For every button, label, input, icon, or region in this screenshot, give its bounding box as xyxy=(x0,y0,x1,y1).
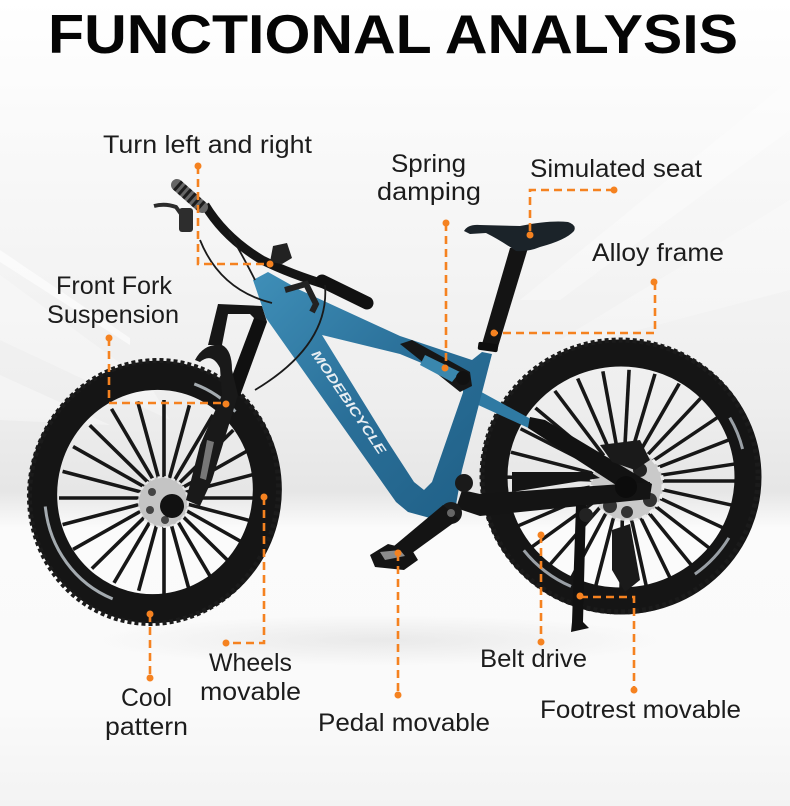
frame xyxy=(253,272,492,518)
rear wheel xyxy=(482,340,758,612)
callout: simulated seat: Simulated seat xyxy=(530,155,702,183)
callout: spring damping: damping xyxy=(377,178,481,206)
kickstand xyxy=(571,505,593,632)
title: FUNCTIONAL ANALYSIS xyxy=(48,3,738,65)
seat collar xyxy=(478,342,498,352)
front fork xyxy=(186,304,267,506)
bicycle xyxy=(0,185,758,652)
callout: wheels movable: movable xyxy=(200,678,301,706)
callout: spring damping xyxy=(377,150,481,372)
swingarm and chainstay xyxy=(456,383,652,516)
callout: belt drive xyxy=(480,532,587,673)
handlebar xyxy=(154,185,367,312)
callout: turn left and right: Turn left and right xyxy=(103,131,312,159)
callout: simulated seat xyxy=(526,155,702,238)
callout: belt drive: Belt drive xyxy=(480,645,587,673)
callout: wheels movable: Wheels xyxy=(209,649,292,677)
callout: front fork suspension: Front Fork xyxy=(56,272,173,300)
model name on frame: MODEBICYCLE xyxy=(309,347,389,457)
callout: alloy frame xyxy=(490,239,724,336)
callout: front fork suspension: Suspension xyxy=(47,301,179,329)
brake cables xyxy=(200,232,325,390)
rear disc brake xyxy=(591,449,663,521)
derailleur xyxy=(612,524,640,592)
callout: footrest movable xyxy=(540,592,741,724)
callout: front fork suspension xyxy=(47,272,230,408)
callout: cool pattern xyxy=(105,610,188,741)
callout: alloy frame: Alloy frame xyxy=(592,239,724,267)
callout: cool pattern: Cool xyxy=(121,684,172,712)
callout: footrest movable: Footrest movable xyxy=(540,696,741,724)
pedal xyxy=(370,544,418,570)
callout: pedal movable: Pedal movable xyxy=(318,709,490,737)
callout: cool pattern: pattern xyxy=(105,713,188,741)
callout: wheels movable xyxy=(200,494,301,706)
seat post xyxy=(482,248,528,347)
callout: turn left and right xyxy=(103,131,312,268)
front wheel xyxy=(0,332,308,652)
bottom bracket and crank xyxy=(394,474,473,556)
callout: spring damping: Spring xyxy=(391,150,466,178)
rear shock xyxy=(400,340,472,392)
saddle xyxy=(464,222,575,251)
callout: pedal movable xyxy=(318,550,490,737)
front disc brake xyxy=(138,477,188,527)
